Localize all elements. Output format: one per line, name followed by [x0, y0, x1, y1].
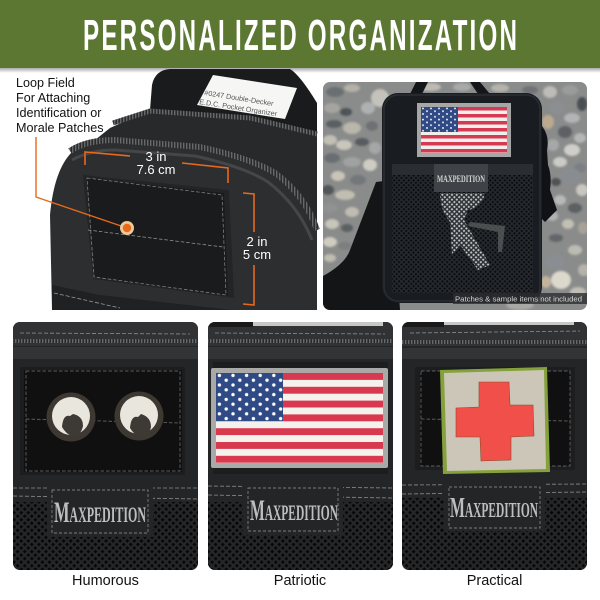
brand label	[444, 483, 545, 531]
brand label on pouch: MAXPEDITION	[437, 175, 485, 185]
flag patch on pouch	[417, 103, 511, 157]
item label tag	[197, 75, 297, 119]
brand label on pouch	[434, 164, 488, 192]
brand label	[243, 483, 343, 535]
panel: humorous patch photo	[13, 322, 198, 570]
patch: googly eye left	[46, 392, 96, 442]
callout: loop field text: For Attaching	[16, 91, 90, 105]
caption: humorous: Humorous	[72, 573, 139, 589]
zipper band	[13, 322, 198, 346]
title: PERSONALIZED ORGANIZATION	[83, 10, 517, 60]
panel: patriotic patch photo	[208, 322, 393, 570]
glove hand	[323, 180, 400, 310]
callout: loop field text: Loop Field	[16, 76, 75, 90]
bag front body	[50, 140, 317, 310]
width label: 7.6 cm	[136, 162, 176, 177]
width label	[136, 149, 176, 177]
lower zipper	[70, 140, 317, 230]
panel: pouch loop field dimensions photo	[36, 69, 317, 310]
callout: loop field text: Identification or	[16, 106, 101, 120]
leader line and dot	[36, 137, 134, 235]
bottom seam	[52, 285, 232, 310]
height bracket	[243, 193, 254, 305]
height label: 5 cm	[243, 247, 271, 262]
width bracket	[85, 152, 228, 183]
height label	[243, 234, 271, 262]
bag handle	[150, 69, 317, 135]
zipper pull	[542, 126, 557, 222]
mesh pocket	[208, 502, 393, 570]
zipper band	[402, 322, 587, 346]
callout: loop field text	[16, 76, 104, 135]
panel: pouch on gravel photo	[322, 82, 590, 310]
pouch straps	[410, 82, 489, 93]
medical cross patch	[440, 367, 550, 474]
loop field velcro	[83, 175, 234, 298]
bag upper section	[70, 110, 317, 240]
caption: patriotic: Patriotic	[274, 573, 326, 589]
header banner	[0, 0, 600, 73]
loop field	[420, 370, 570, 466]
item label tag: #0247 Double-Decker	[204, 88, 275, 108]
height label: 2 in	[247, 234, 267, 249]
brand label: MAXPEDITION	[250, 494, 338, 527]
mesh pocket	[402, 498, 587, 570]
sample items through mesh	[440, 193, 505, 270]
zipper band	[208, 322, 393, 346]
brand label: MAXPEDITION	[54, 496, 146, 529]
brand label	[47, 485, 153, 537]
brand label: MAXPEDITION	[450, 492, 538, 524]
loop field	[20, 367, 185, 475]
item label tag: E.D.C. Pocket Organizer	[199, 97, 278, 118]
large flag patch	[211, 368, 388, 468]
caption: patches not included: Patches & sample items not included	[455, 294, 582, 304]
caption: practical: Practical	[467, 573, 522, 589]
callout: loop field text: Morale Patches	[16, 121, 104, 135]
mesh pocket	[13, 502, 198, 570]
panel: practical patch photo	[402, 322, 587, 570]
gravel background	[322, 82, 590, 310]
width label: 3 in	[146, 149, 166, 164]
mesh pocket	[392, 173, 533, 293]
pouch body	[382, 93, 542, 303]
patch: googly eye right	[114, 392, 164, 440]
